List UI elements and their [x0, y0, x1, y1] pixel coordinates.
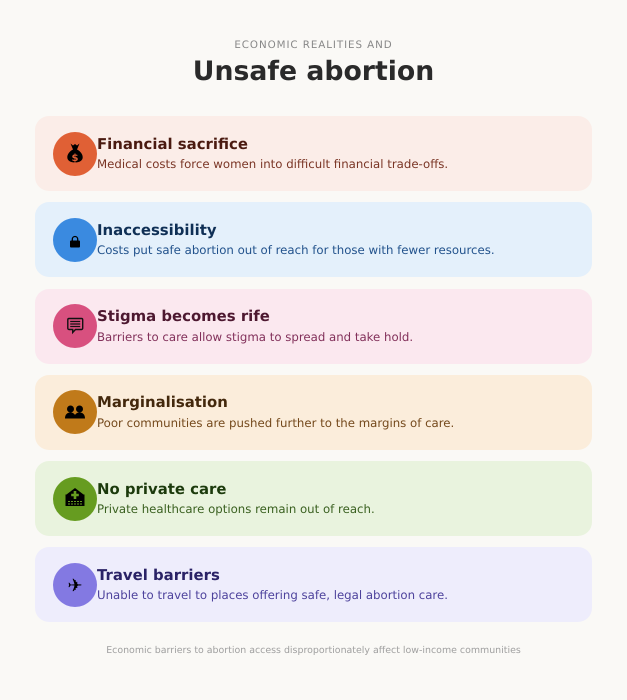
icon: padlock — [53, 218, 97, 262]
icon: money bag — [53, 132, 97, 176]
description: inaccessibility: Costs put safe abortion out of reach for those with fewer resources. — [97, 243, 495, 257]
heading: travel barriers: Travel barriers — [97, 566, 220, 584]
heading: financial sacrifice: Financial sacrifice — [97, 134, 248, 152]
description: marginalisation: Poor communities are pushed further to the margins of care. — [97, 416, 454, 430]
title: Unsafe abortion — [193, 56, 434, 87]
panel: marginalisation — [35, 375, 592, 450]
heading: no private care: No private care — [97, 480, 226, 498]
description: travel barriers: Unable to travel to places offering safe, legal abortion care. — [97, 588, 448, 602]
panel: inaccessibility — [35, 202, 592, 277]
heading: stigma becomes rife: Stigma becomes rife — [97, 307, 270, 325]
icon: airplane: ✈ — [67, 575, 83, 596]
icon: speech bubble — [53, 304, 97, 348]
icon: money bag: $ — [72, 152, 79, 164]
icon: hospital — [53, 476, 97, 520]
description: financial sacrifice: Medical costs force women into difficult financial trade-offs. — [97, 157, 448, 171]
description: stigma becomes rife: Barriers to care allow stigma to spread and take hold. — [97, 330, 413, 344]
heading: marginalisation: Marginalisation — [97, 393, 228, 411]
eyebrow heading: ECONOMIC REALITIES AND — [234, 39, 393, 51]
panel: stigma becomes rife — [35, 289, 592, 364]
icon: airplane — [53, 563, 97, 607]
panel: no private care — [35, 461, 592, 536]
panel: financial sacrifice — [35, 116, 592, 191]
description: no private care: Private healthcare options remain out of reach. — [97, 502, 375, 516]
heading: inaccessibility: Inaccessibility — [97, 221, 217, 239]
panel: travel barriers — [35, 547, 592, 622]
icon: two people — [53, 390, 97, 434]
footer note: Economic barriers to abortion access disproportionately affect low-income communities — [106, 644, 521, 656]
